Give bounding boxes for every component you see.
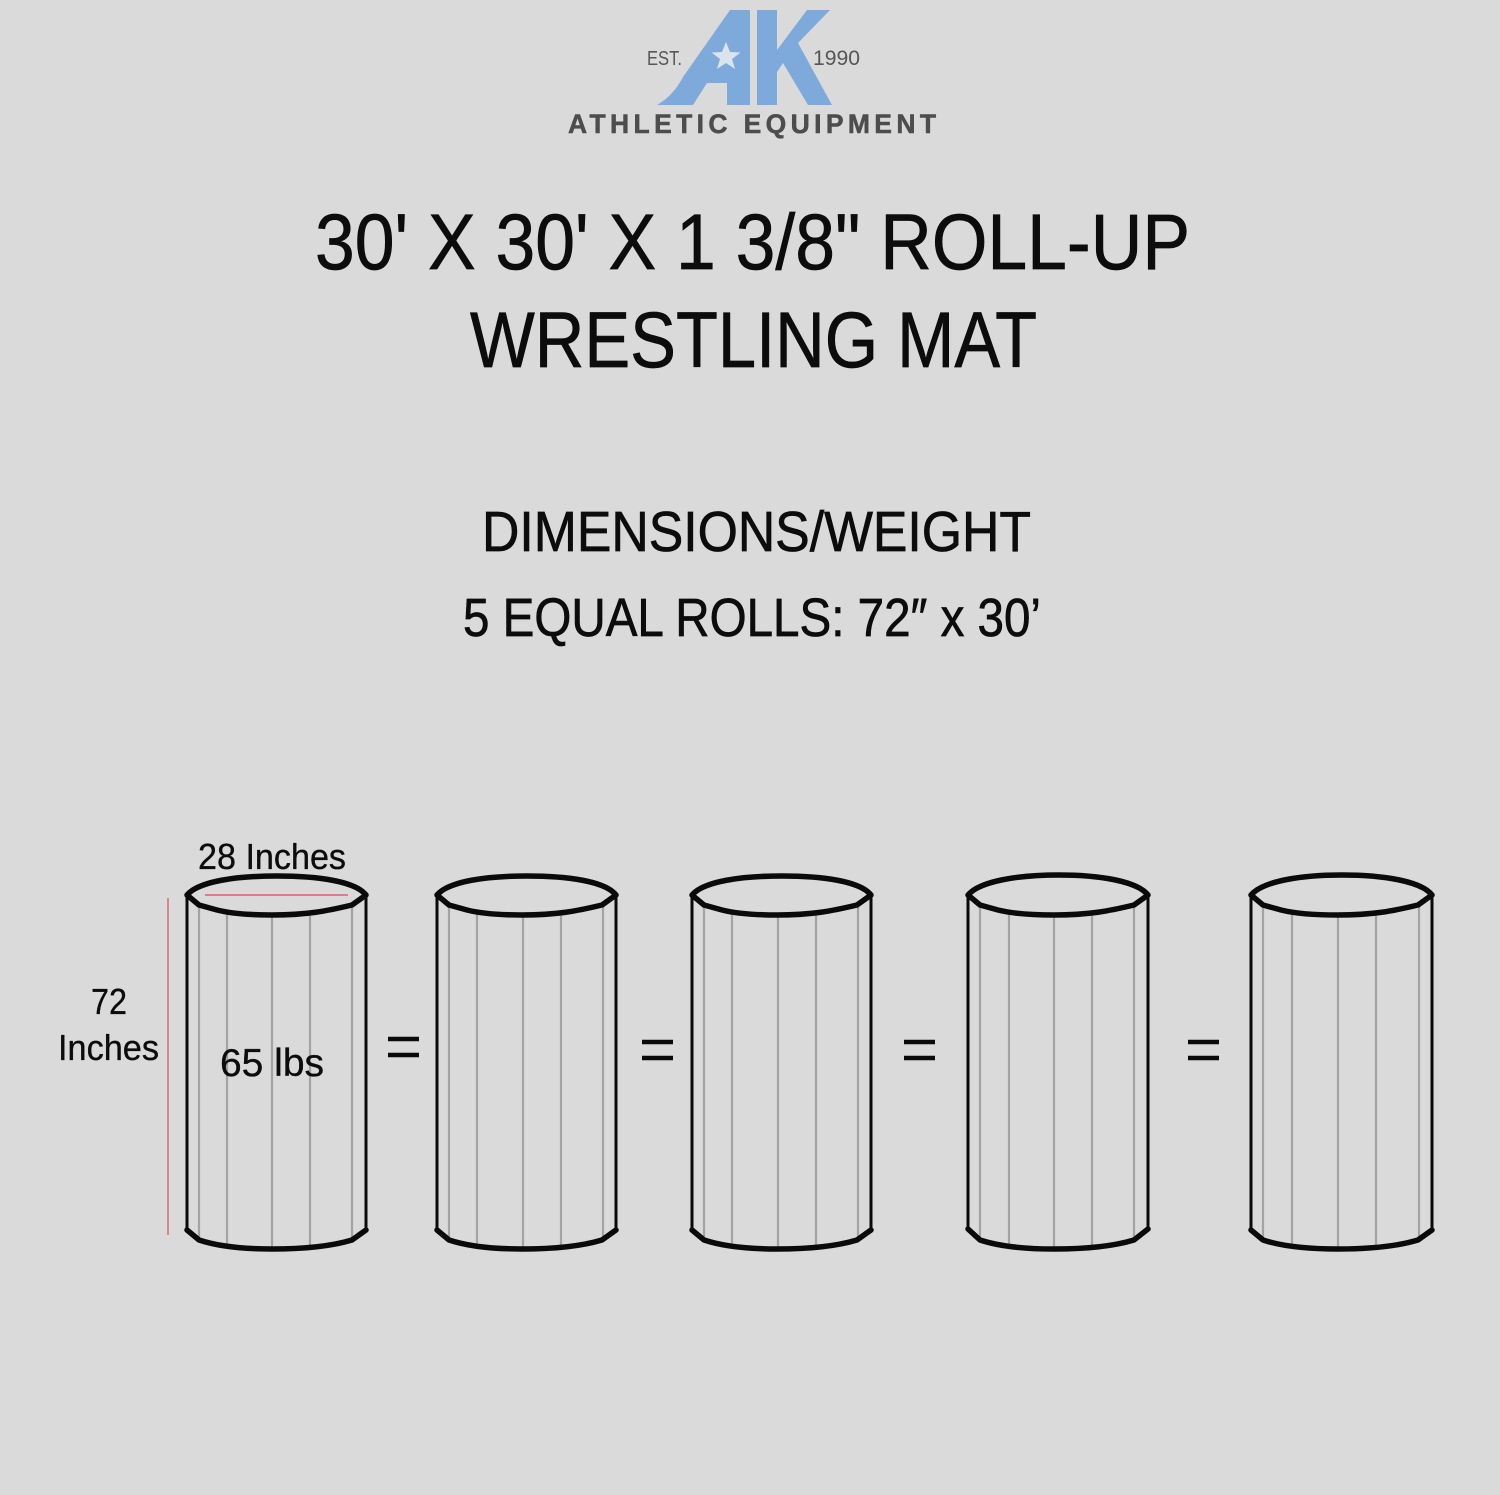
logo text: 1990: 1990	[813, 47, 860, 70]
logo star	[712, 42, 740, 69]
logo text: est.: EST.	[647, 48, 682, 70]
red dimension line: height	[167, 898, 169, 1235]
subtitle: rolls: 5 EQUAL ROLLS: 72″ x 30’	[463, 588, 1041, 648]
title line 2: WRESTLING MAT	[470, 295, 1037, 384]
red dimension line: width	[205, 894, 348, 896]
label: 65 lbs: 65 lbs	[220, 1042, 324, 1085]
label: 72 inches: Inches	[58, 1027, 159, 1068]
logo letter A	[657, 10, 750, 105]
cylinder 1	[187, 876, 366, 1249]
cylinder 2	[437, 876, 616, 1249]
cylinder 4	[968, 875, 1148, 1249]
cylinder 3	[692, 876, 871, 1249]
equals sign 4	[1188, 1042, 1219, 1058]
equals sign 2	[642, 1042, 673, 1058]
logo: AK Athletic Equipment	[568, 10, 936, 139]
label: 28 inches: 28 Inches	[198, 836, 346, 877]
subtitle: dimensions/weight: DIMENSIONS/WEIGHT	[482, 500, 1031, 564]
label: 72 inches: 72	[91, 981, 127, 1022]
equals sign 1	[388, 1039, 419, 1055]
cylinder 5	[1251, 875, 1432, 1249]
equals sign 3	[904, 1042, 935, 1058]
logo text: athletic equipment: ATHLETIC EQUIPMENT	[568, 109, 936, 139]
title line 1: 30' X 30' X 1 3/8" ROLL-UP	[315, 197, 1190, 286]
label: 72 inches	[58, 981, 159, 1068]
logo letter K	[757, 10, 832, 105]
